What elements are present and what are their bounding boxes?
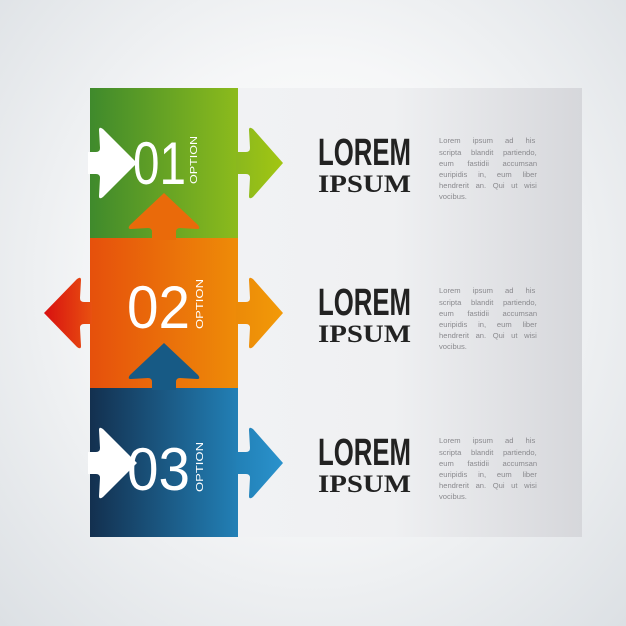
heading row 2: LOREM [318,282,411,324]
paragraph row 2: scripta blandit partiendo, [439,298,537,307]
number 03: 03 [127,436,190,503]
panel: row 2 [238,238,582,388]
heading row 2 [318,282,411,348]
arrow: right blue [236,428,283,498]
block: option 02 [90,238,238,388]
paragraph row 2: hendrerit an. Qui ut wisi [439,331,537,340]
paragraph row 2: eum fastidii accumsan [439,309,537,318]
panel: row 1 [238,88,582,238]
paragraph row 3: vocibus. [439,492,467,501]
number 02: 02 [127,274,190,341]
paragraph row 3: euripidis in, eum liber [439,470,537,479]
arrow: left white row1 [88,128,137,198]
panel: row 3 [238,388,582,537]
paragraph row 1: vocibus. [439,192,467,201]
paragraph row 1: scripta blandit partiendo, [439,148,537,157]
paragraph row 3: hendrerit an. Qui ut wisi [439,481,537,490]
arrow: left white row3 [88,428,137,498]
paragraph row 1: hendrerit an. Qui ut wisi [439,181,537,190]
arrow: up blue [129,343,199,390]
paragraph row 3: scripta blandit partiendo, [439,448,537,457]
paragraph row 2: Lorem ipsum ad his [439,286,535,295]
heading row 1: IPSUM [318,171,411,198]
paragraph row 3 [439,436,537,501]
number 01: 01 [133,130,186,197]
arrow: up orange [129,193,199,240]
paragraph row 2: vocibus. [439,342,467,351]
number 02: OPTION [195,279,206,329]
block: option 03 [90,388,238,537]
arrow: right green [236,128,283,198]
paragraph row 3: eum fastidii accumsan [439,459,537,468]
number 03: OPTION [195,442,206,492]
number 01: OPTION [189,136,200,184]
block: option 01 [90,88,238,238]
paragraph row 1: eum fastidii accumsan [439,159,537,168]
paragraph row 1: euripidis in, eum liber [439,170,537,179]
paragraph row 2 [439,286,537,351]
arrow: right orange [236,278,283,348]
heading row 1: LOREM [318,132,411,174]
heading row 3 [318,432,411,498]
paragraph row 1: Lorem ipsum ad his [439,136,535,145]
paragraph row 3: Lorem ipsum ad his [439,436,535,445]
heading row 3: LOREM [318,432,411,474]
heading row 2: IPSUM [318,321,411,348]
paragraph row 2: euripidis in, eum liber [439,320,537,329]
heading row 1 [318,132,411,198]
paragraph row 1 [439,136,537,201]
heading row 3: IPSUM [318,471,411,498]
arrow: left red row2 [44,278,92,348]
